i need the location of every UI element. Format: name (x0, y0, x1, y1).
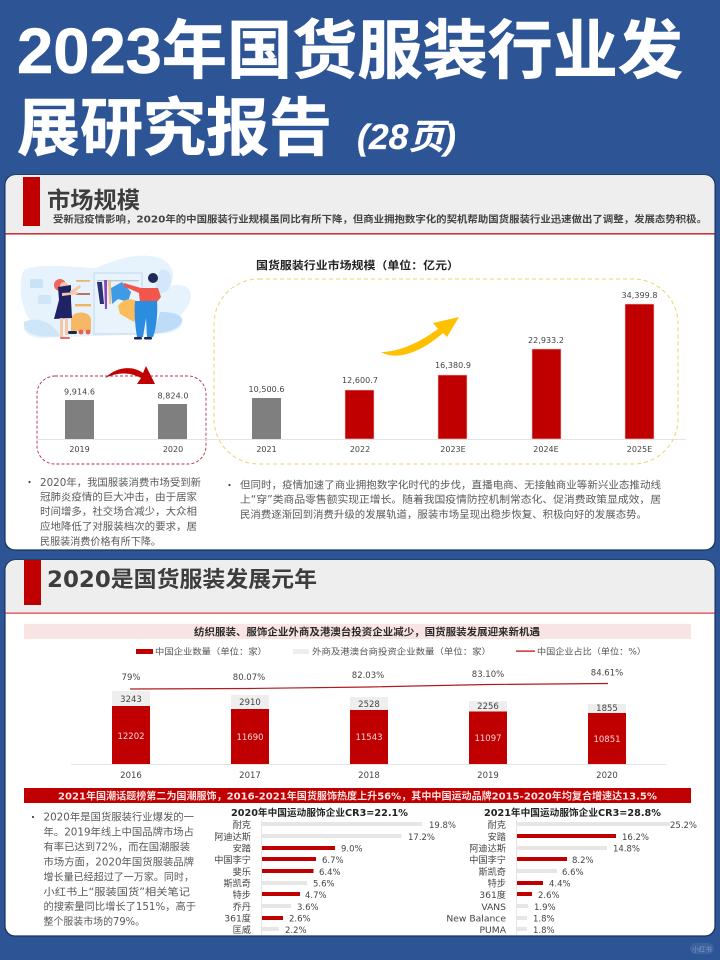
bar chart: market size: 9,914.6 (64, 388, 95, 396)
heading: market size: 市场规模 (47, 187, 140, 214)
bar chart: market size: 2022 (350, 445, 370, 454)
bar chart: 2020 sports brands: 阿迪达斯 (214, 831, 251, 843)
banner: red: 2021年国潮话题榜第二为国潮服饰，2016-2021年国货服饰热度上升56%，其中中国运动品牌2015-2020年均复合增速达13.5% (58, 790, 657, 802)
icon: red header block (24, 560, 41, 605)
legend: 中国企业数量（单位：家） (155, 646, 267, 658)
text block: 2020 decline: 民服装消费价格有所下降。 (40, 535, 161, 548)
bar chart: enterprise counts: 11690 (236, 733, 264, 743)
bar chart: 2021 sports brands: 特步 (488, 878, 506, 890)
bar chart: 2021 sports brands: 斯凯奇 (478, 866, 506, 878)
bar chart: enterprise counts: 11097 (474, 734, 502, 744)
bar chart: 2021 sports brands: 25.2% (670, 821, 697, 831)
text block: 2020 outbreak: 年。2019年线上中国品牌市场占 (44, 826, 194, 838)
bar chart: 2020 sports brands: 特步 (233, 889, 251, 901)
bar chart: 2021 sports brands: 中国李宁 (469, 854, 506, 866)
bar chart: market size: 2025E (627, 445, 652, 454)
legend (136, 646, 646, 658)
text block: 2020 outbreak: 小红书上“服装国货”相关笔记 (44, 886, 190, 898)
bar chart: 2021 sports brands: 阿迪达斯 (469, 842, 506, 854)
text block: 2020 outbreak: 2020年是国货服装行业爆发的一 (44, 810, 194, 824)
text block: 2020 outbreak: 增长量已经超过了一万家。同时， (44, 870, 194, 884)
bar chart: market size: 2023E (440, 445, 466, 454)
text block: 2020 outbreak: 有率已达到72%，而在国潮服装 (44, 840, 190, 854)
bar chart: market size: 2020 (163, 445, 183, 454)
bar chart: enterprise counts: 12202 (117, 732, 145, 742)
text block: 2020 outbreak (32, 810, 196, 928)
bar chart: 2020 sports brands: 361度 (224, 912, 251, 924)
line chart: domestic share (122, 668, 623, 689)
bar chart: 2020 sports brands: 2020年中国运动服饰企业CR3=22.1% (231, 807, 408, 819)
bar chart: enterprise counts: 10851 (593, 735, 621, 745)
bar chart: market size: 34,399.8 (622, 291, 658, 300)
bar chart: 2021 sports brands: New Balance (446, 914, 506, 924)
panel: 2020 domestic apparel (5, 560, 715, 936)
title (17, 15, 683, 164)
bar chart: 2020 sports brands: 2.2% (285, 926, 307, 936)
legend: 中国企业占比（单位：%） (537, 646, 646, 658)
bar chart: enterprise counts: 2016 (120, 771, 142, 781)
bar chart: market size (37, 291, 686, 454)
bar chart: enterprise counts (71, 691, 666, 781)
banner: pink: 纺织服装、服饰企业外商及港澳台投资企业减少，国货服装发展迎来新机遇 (194, 626, 540, 638)
bar chart: market size: 16,380.9 (435, 361, 471, 370)
bar chart: 2021 sports brands: 1.8% (533, 926, 555, 936)
text block: 2020 decline: 冠肺炎疫情的巨大冲击，由于居家 (40, 490, 197, 504)
banner: pink (24, 624, 691, 639)
text block: 2020 outbreak: 的搜索量同比增长了151%，高于 (44, 900, 196, 913)
text block: recovery: 上“穿”类商品零售额实现正增长。随着我国疫情防控机制常态化、促消费政策显成效，居 (240, 493, 661, 506)
text block: 2020 outbreak: 整个服装市场的79%。 (44, 915, 145, 928)
line chart: domestic share: 79% (122, 673, 140, 683)
bar chart: 2020 sports brands: 4.7% (305, 891, 327, 901)
bar chart: enterprise counts: 2017 (239, 771, 261, 781)
bar chart: 2020 sports brands: 斐乐 (233, 866, 251, 878)
bar chart: 2020 sports brands: 19.8% (429, 821, 456, 831)
icon: shopping illustration (21, 256, 191, 340)
text block: 2020 decline: 2020年，我国服装消费市场受到新 (40, 476, 201, 489)
line chart: domestic share: 80.07% (233, 673, 265, 683)
bar chart: market size: 2024E (533, 445, 559, 454)
text block: recovery: 但同时，疫情加速了商业拥抱数字化时代的步伐，直播电商、无接触商业等新兴业态推动线 (240, 478, 661, 492)
bar chart: 2021 sports brands: 361度 (479, 889, 506, 901)
bar chart: market size: 2019 (69, 445, 90, 454)
bar chart: 2020 sports brands: 安踏 (233, 842, 251, 854)
line chart: domestic share: 84.61% (591, 668, 623, 678)
bar chart: 2020 sports brands: 6.4% (319, 868, 341, 878)
bar chart: 2021 sports brands: PUMA (480, 925, 507, 936)
bar chart: 2020 sports brands: 5.6% (313, 880, 335, 890)
text block: 2020 decline (28, 476, 201, 548)
bar chart: enterprise counts: 2910 (239, 698, 261, 708)
bar chart: 2020 sports brands: 乔丹 (233, 901, 251, 913)
bar chart: enterprise counts: 2256 (477, 702, 499, 712)
title: 2023年国货服装行业发 (17, 15, 683, 87)
bar chart: 2021 sports brands (446, 807, 697, 936)
bar chart: 2021 sports brands: 耐克 (488, 819, 506, 831)
bar chart: enterprise counts: 1855 (596, 704, 618, 714)
bar chart: 2020 sports brands: 3.6% (297, 903, 319, 913)
bar chart: 2021 sports brands: VANS (481, 902, 506, 913)
bar chart: 2021 sports brands: 1.8% (533, 914, 555, 924)
bar chart: 2020 sports brands: 匡威 (233, 924, 251, 936)
bar chart: market size: 22,933.2 (528, 336, 564, 345)
legend: 外商及港澳台商投资企业数量（单位：家） (312, 646, 491, 658)
bar chart: enterprise counts: 2020 (596, 771, 618, 781)
bar chart: 2020 sports brands: 耐克 (233, 819, 251, 831)
subtitle: 受新冠疫情影响，2020年的中国服装行业规模虽同比有所下降，但商业拥抱数字化的契机帮助国货服装行业迅速做出了调整，发展态势积极。 (53, 214, 707, 226)
line chart: domestic share: 83.10% (472, 670, 504, 680)
title: (28页) (357, 118, 456, 157)
bar chart: market size: 12,600.7 (342, 376, 378, 385)
arrow: red decline (105, 366, 155, 384)
callout: decline box (37, 376, 206, 464)
text block: 2020 decline: 时间增多，社交场合减少，大众相 (40, 505, 197, 518)
watermark (690, 943, 714, 954)
bar chart: market size: 2021 (256, 445, 277, 454)
bar chart: market size: 8,824.0 (158, 392, 188, 400)
bar chart: 2021 sports brands: 2021年中国运动服饰企业CR3=28.8% (484, 807, 661, 819)
line chart: domestic share: 82.03% (352, 671, 384, 681)
text block: recovery: 民消费逐渐回到消费升级的发展轨道，服装市场呈现出稳步恢复、积极向好的发展态势。 (240, 508, 647, 521)
bar chart: 2020 sports brands: 17.2% (408, 833, 435, 843)
icon: red header block (23, 177, 40, 226)
bar chart: enterprise counts: 2528 (358, 700, 380, 710)
bar chart: 2021 sports brands: 安踏 (488, 831, 506, 843)
callout: growth box (214, 279, 678, 464)
bar chart: 2021 sports brands: 8.2% (572, 856, 594, 866)
bar chart: 2021 sports brands: 2.6% (538, 891, 560, 901)
bar chart: 2021 sports brands: 4.4% (549, 880, 571, 890)
bar chart: market size: 10,500.6 (248, 385, 284, 394)
bar chart: 2021 sports brands: 16.2% (622, 833, 649, 843)
bar chart: enterprise counts: 3243 (120, 695, 142, 705)
bar chart: 2021 sports brands: 1.9% (534, 903, 556, 913)
chart title: market size: 国货服装行业市场规模（单位：亿元） (256, 258, 459, 272)
heading: 2020: 2020是国货服装发展元年 (47, 568, 317, 593)
bar chart: 2021 sports brands: 14.8% (613, 844, 640, 854)
arrow: yellow growth (381, 317, 459, 356)
bar chart: 2020 sports brands: 中国李宁 (214, 854, 251, 866)
text block: 2020 outbreak: 市场方面，2020年国货服装品牌 (44, 856, 194, 868)
text block: recovery (228, 478, 661, 521)
bar chart: 2020 sports brands: 6.7% (322, 856, 344, 866)
text block: 2020 decline: 应地降低了对服装档次的要求，居 (40, 520, 197, 533)
bar chart: enterprise counts: 2019 (477, 771, 499, 781)
banner: red (24, 788, 691, 803)
bar chart: 2021 sports brands: 6.6% (562, 868, 584, 878)
bar chart: 2020 sports brands: 2.6% (289, 914, 311, 924)
bar chart: 2020 sports brands: 斯凯奇 (223, 878, 251, 890)
bar chart: enterprise counts: 11543 (355, 733, 383, 743)
watermark: 小红书 (692, 944, 712, 954)
bar chart: enterprise counts: 2018 (358, 771, 380, 781)
panel: market size (5, 175, 715, 550)
bar chart: 2020 sports brands (214, 807, 456, 936)
bar chart: 2020 sports brands: 9.0% (341, 844, 363, 854)
title: 展研究报告 (17, 94, 332, 164)
